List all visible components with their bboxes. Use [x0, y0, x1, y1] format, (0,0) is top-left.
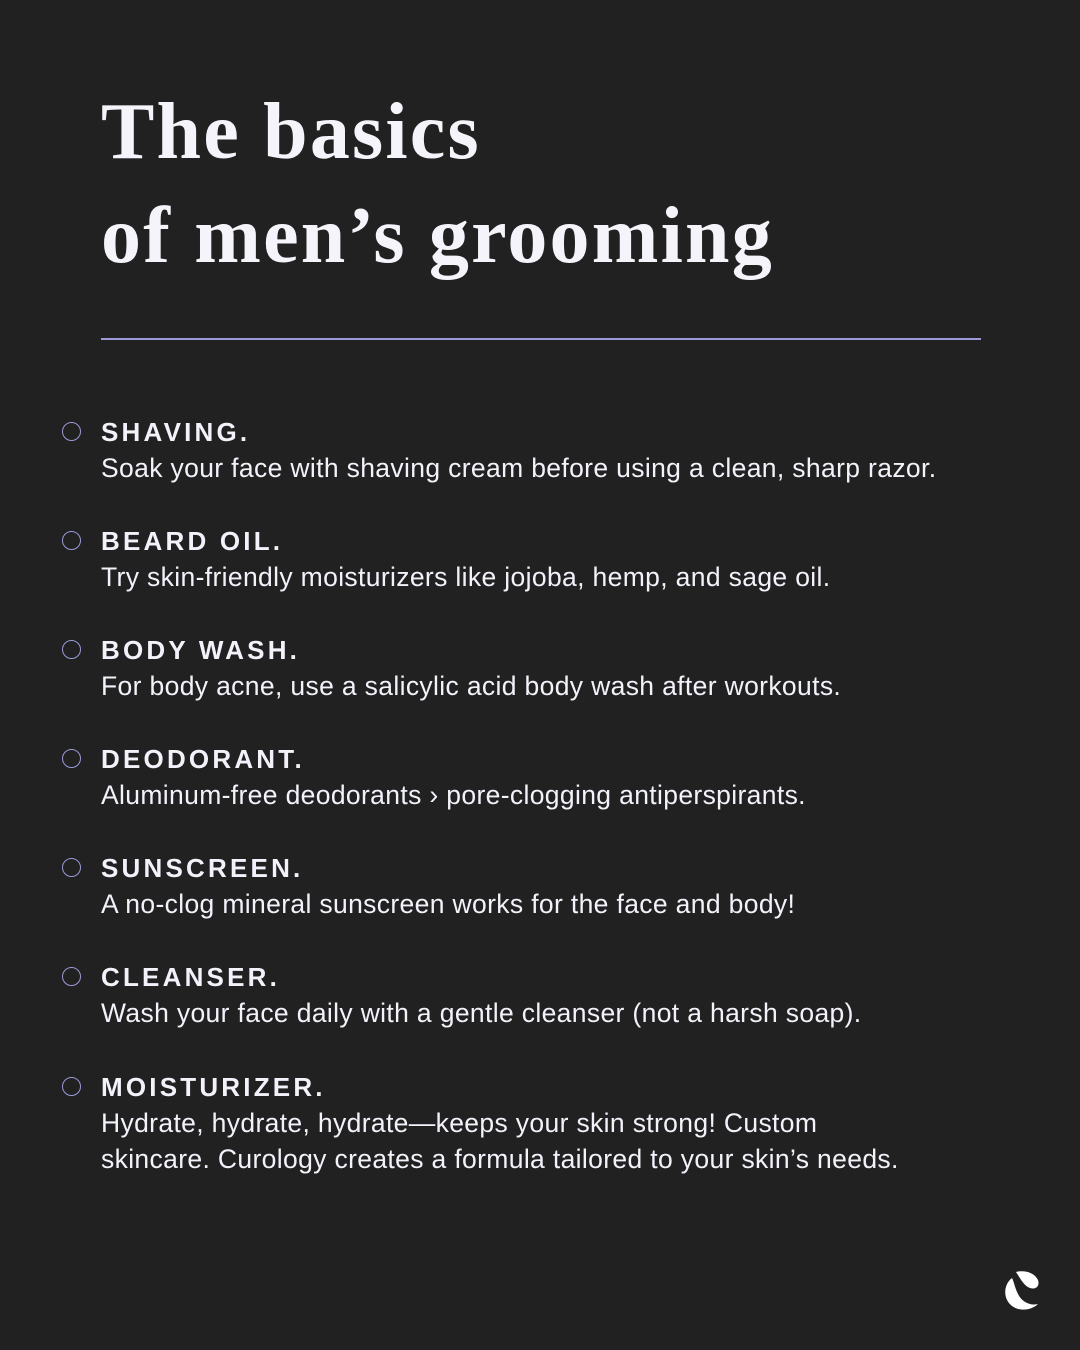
- item: cleanser: [62, 962, 862, 1028]
- item: beard oil: [62, 526, 830, 592]
- text: Hydrate, hydrate, hydrate—keeps your skin strong! Custom: [101, 1108, 817, 1138]
- item: sunscreen: [62, 853, 795, 919]
- text: Wash your face daily with a gentle cleanser (not a harsh soap).: [101, 998, 862, 1028]
- text: SUNSCREEN.: [101, 853, 303, 883]
- title: The basics: [101, 88, 481, 176]
- item: shaving: [62, 417, 936, 483]
- text: Soak your face with shaving cream before using a clean, sharp razor.: [101, 453, 936, 483]
- text: A no-clog mineral sunscreen works for the face and body!: [101, 889, 795, 919]
- title: [101, 88, 774, 280]
- text: BEARD OIL.: [101, 526, 283, 556]
- icon: logo: [1005, 1271, 1038, 1310]
- item: body wash: [62, 635, 841, 701]
- text: CLEANSER.: [101, 962, 280, 992]
- text: Aluminum-free deodorants › pore-clogging antiperspirants.: [101, 780, 806, 810]
- text: BODY WASH.: [101, 635, 300, 665]
- title: of men’s grooming: [101, 192, 774, 280]
- text: SHAVING.: [101, 417, 250, 447]
- text: Try skin-friendly moisturizers like jojoba, hemp, and sage oil.: [101, 562, 830, 592]
- text: MOISTURIZER.: [101, 1072, 326, 1102]
- text: skincare. Curology creates a formula tailored to your skin’s needs.: [101, 1144, 899, 1174]
- text: DEODORANT.: [101, 744, 305, 774]
- text: For body acne, use a salicylic acid body wash after workouts.: [101, 671, 841, 701]
- item: deodorant: [62, 744, 806, 810]
- item: moisturizer: [62, 1072, 899, 1174]
